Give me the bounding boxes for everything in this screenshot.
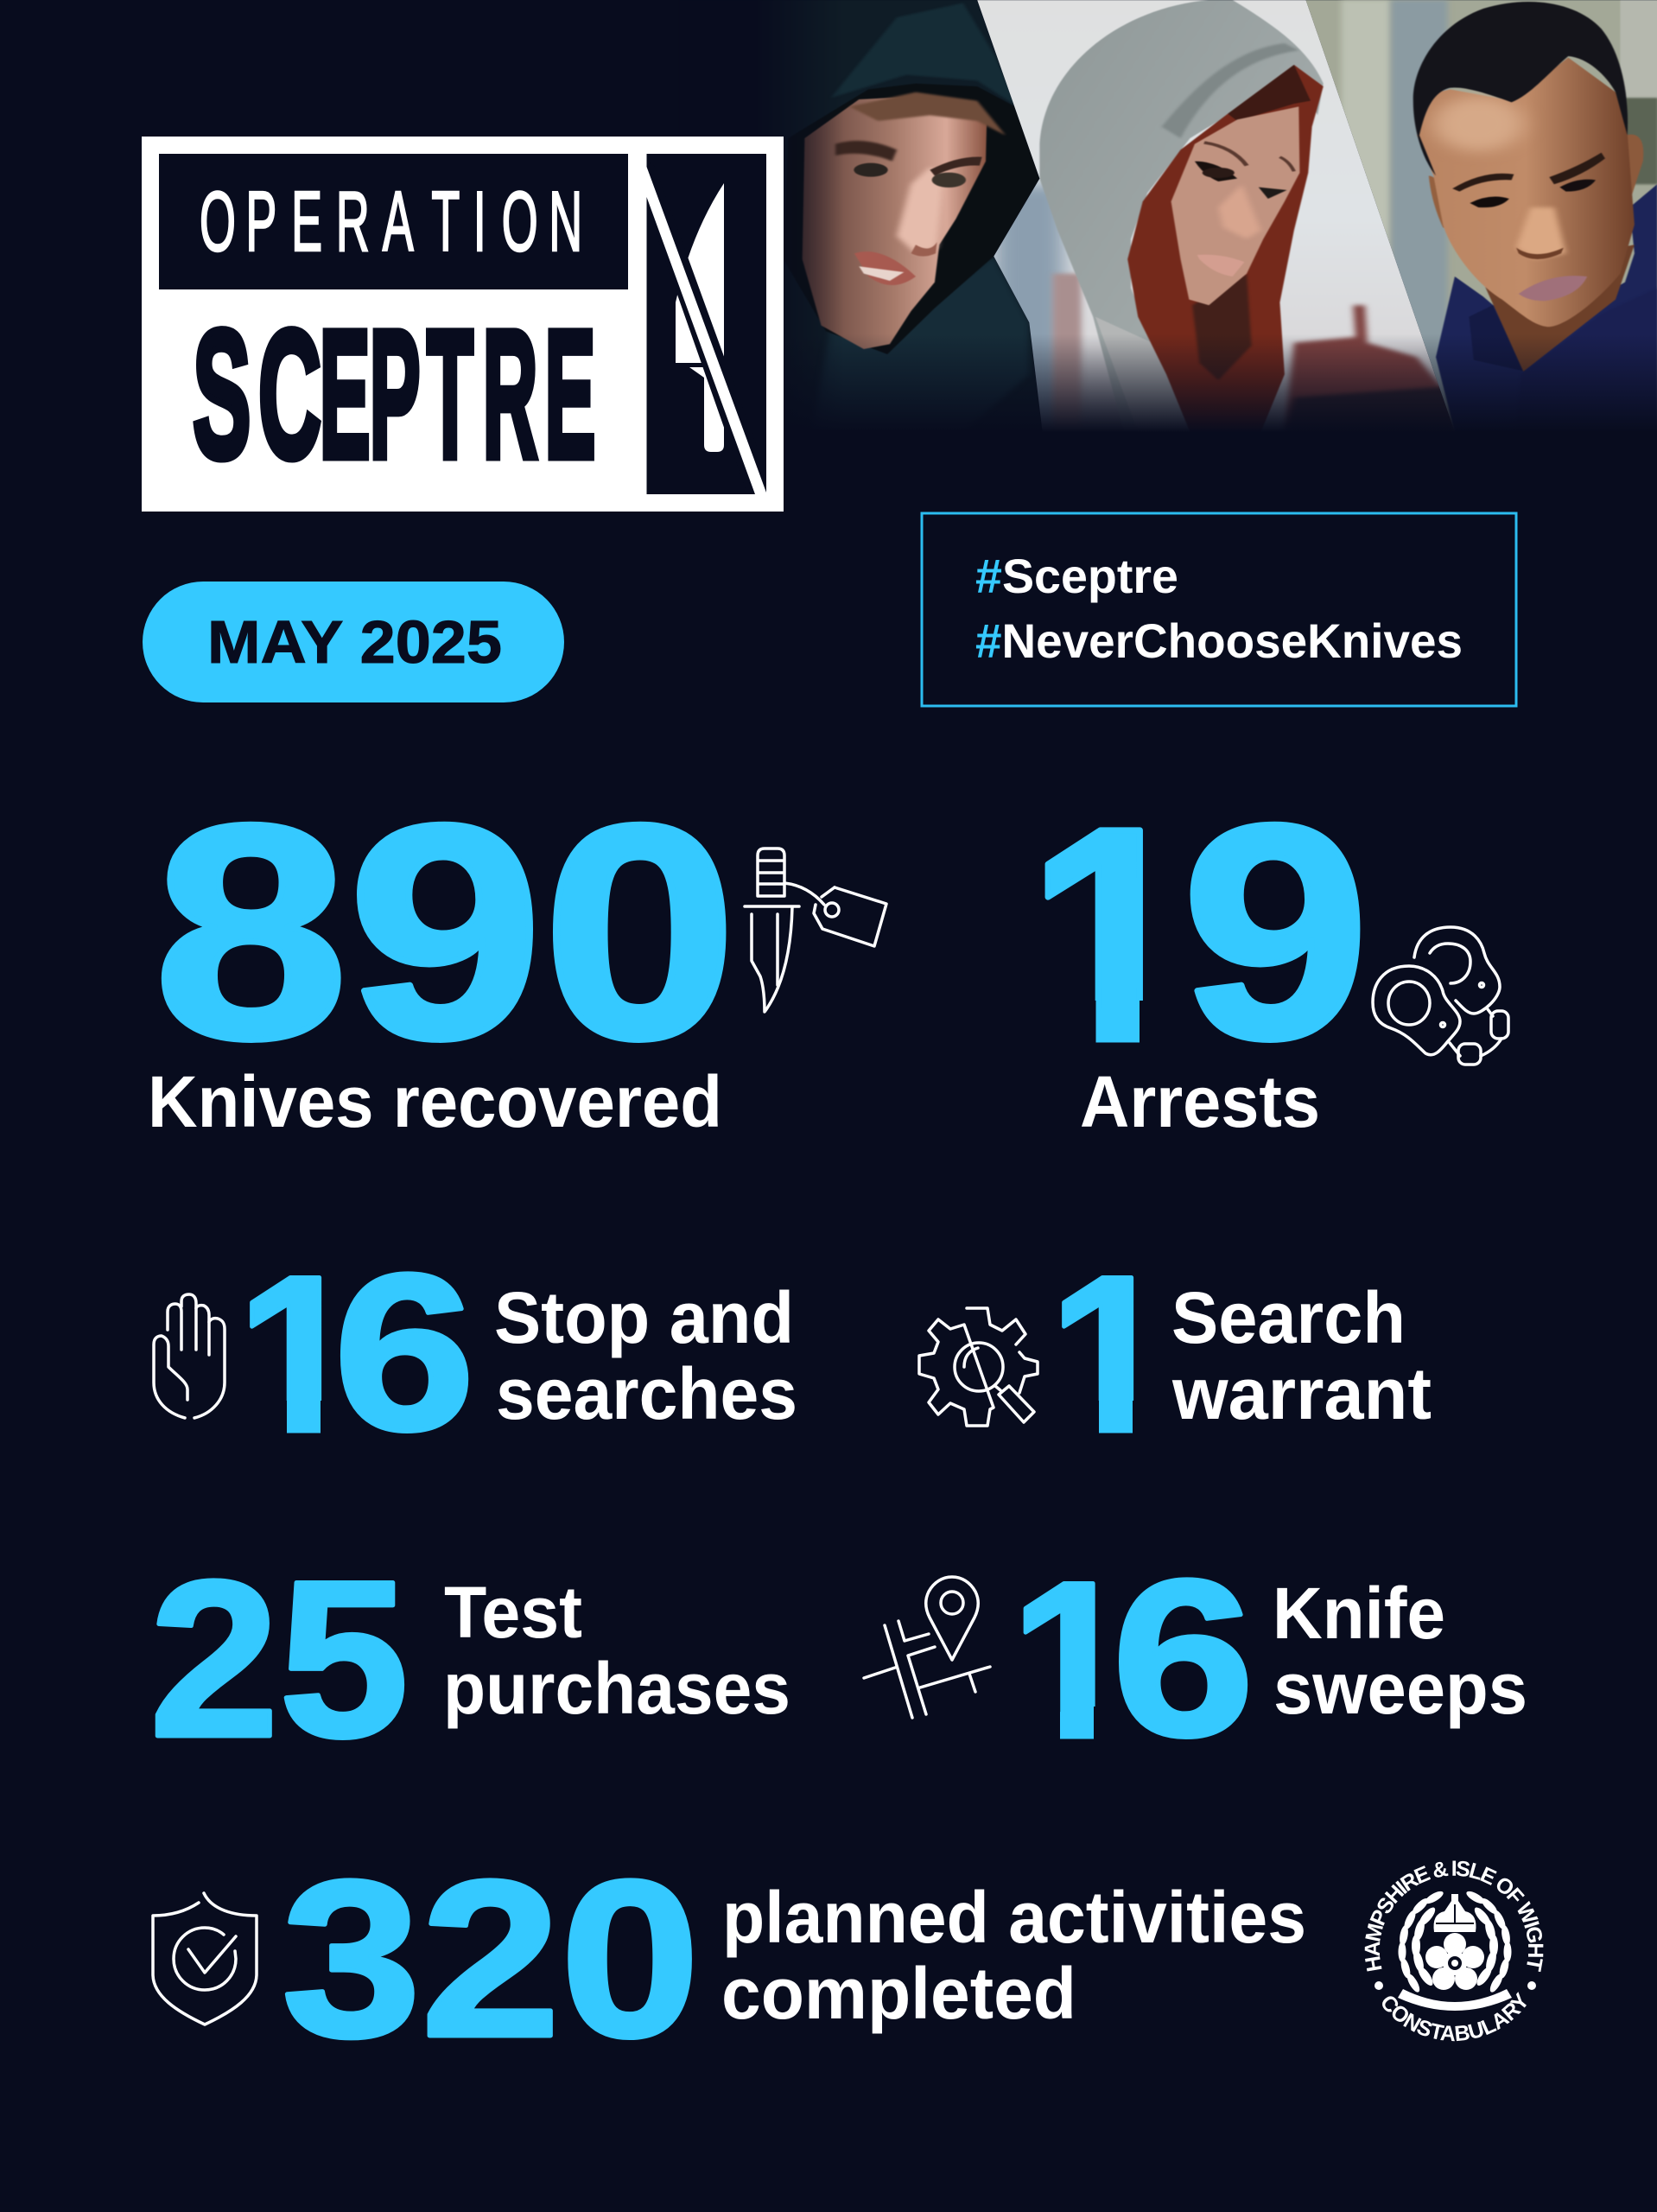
label: Search bbox=[1171, 1277, 1406, 1358]
crest: ribbon bbox=[1398, 1989, 1512, 2011]
icon: gear with magnifying glass bbox=[919, 1308, 1038, 1426]
number 16: 1 bbox=[1011, 1535, 1134, 1784]
hashtag box bbox=[922, 513, 1516, 706]
number 16: 1 bbox=[237, 1229, 361, 1478]
left fade into background bbox=[755, 0, 838, 359]
stat: 1 search warrant: 1 bbox=[1049, 1229, 1173, 1478]
icon: handcuffs bbox=[1373, 927, 1508, 1065]
crest: ring text bottom: CONSTABULARY bbox=[1382, 1992, 1527, 2041]
crest: right wreath bbox=[1464, 1889, 1512, 1994]
bottom fade into background bbox=[537, 334, 1657, 433]
photo panel: boy in dark hood bbox=[802, 0, 1038, 408]
stat: 890 knives recovered: 890 bbox=[154, 761, 737, 1102]
logo: Operation Sceptre bbox=[142, 137, 784, 512]
logo: OPERATION bar bbox=[159, 154, 628, 289]
photo strip: three young people in hoods bbox=[802, 0, 1657, 429]
stat: 19 arrests bbox=[1045, 821, 1510, 1128]
crest: side dots bbox=[1374, 1981, 1536, 1990]
label: Knife bbox=[1273, 1573, 1445, 1654]
number 19: 9 bbox=[1182, 761, 1369, 1102]
stat: 320 planned activities completed bbox=[153, 1834, 1306, 2083]
stat: 25 test purchases: 25 bbox=[149, 1534, 409, 1783]
date pill: MAY 2025 bbox=[207, 608, 502, 676]
number 19 bbox=[1045, 821, 1360, 1043]
number 16: 6 bbox=[1112, 1533, 1254, 1783]
icon: knife with evidence tag bbox=[745, 849, 886, 1012]
label line two: warrant bbox=[1171, 1353, 1432, 1434]
stat: 890 knives recovered bbox=[148, 761, 886, 1142]
label line two: searches bbox=[496, 1353, 797, 1434]
logo: Hampshire and Isle of Wight Constabulary crest bbox=[1365, 1861, 1543, 2041]
icon: shield with tick bbox=[153, 1893, 257, 2024]
number 19: 1 bbox=[1027, 764, 1197, 1104]
logo: crossed-out knife bbox=[646, 154, 766, 501]
crest: crown bbox=[1434, 1894, 1476, 1932]
crest: rose bbox=[1425, 1933, 1484, 1990]
label: Stop and bbox=[494, 1277, 794, 1358]
stat: 25 test purchases bbox=[149, 1534, 790, 1783]
number 16: 6 bbox=[333, 1227, 475, 1477]
label: Arrests bbox=[1080, 1061, 1320, 1142]
date pill bbox=[143, 582, 564, 702]
number 16 bbox=[1023, 1577, 1248, 1739]
stat: 1 search warrant bbox=[917, 1275, 1431, 1433]
photo panel: young man in navy hoodie bbox=[1294, 0, 1657, 432]
number 16 bbox=[250, 1271, 468, 1433]
icon: map pin on streets bbox=[864, 1577, 990, 1718]
icon: raised hand bbox=[154, 1294, 225, 1418]
label line two: completed bbox=[721, 1953, 1076, 2034]
photo panel: girl in grey hood bbox=[977, 0, 1449, 429]
hashtag: NeverChooseKnives: #NeverChooseKnives bbox=[975, 613, 1463, 668]
label: Test bbox=[444, 1572, 582, 1653]
stat: 16 stop and searches bbox=[152, 1271, 795, 1433]
logo: SCEPTRE wordmark bbox=[193, 293, 596, 497]
stat: 16 knife sweeps bbox=[862, 1575, 1525, 1739]
logo: SCEPTRE wordmark: EPTRE bbox=[320, 294, 596, 497]
label: planned activities bbox=[722, 1877, 1306, 1958]
label line two: sweeps bbox=[1273, 1648, 1527, 1729]
crest: left wreath bbox=[1398, 1889, 1445, 1994]
left solid mask bbox=[727, 0, 755, 137]
hashtag: Sceptre: #Sceptre bbox=[975, 549, 1178, 603]
label: Knives recovered bbox=[148, 1061, 722, 1142]
logo: SCEPTRE wordmark: SC bbox=[193, 293, 321, 497]
crest: ring text top: HAMPSHIRE & ISLE OF WIGHT bbox=[1365, 1861, 1543, 1972]
label line two: purchases bbox=[443, 1648, 790, 1729]
logo: OPERATION bar: OPERATION bbox=[200, 174, 582, 269]
stat: 320 planned activities completed: 320 bbox=[282, 1834, 700, 2083]
